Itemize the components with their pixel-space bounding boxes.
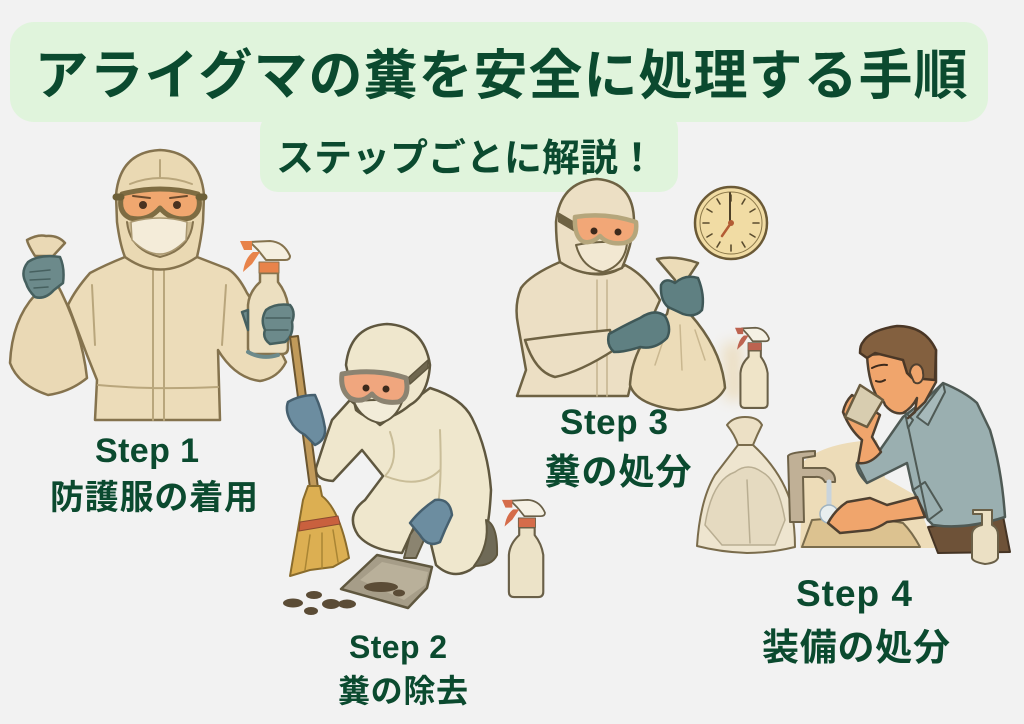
- step 2 label: Step 2: [349, 629, 447, 665]
- boot: [474, 520, 497, 566]
- goggles: [575, 215, 636, 243]
- goggles and face: [121, 189, 199, 219]
- equipment bag: [697, 417, 795, 553]
- subtitle banner: [260, 112, 678, 192]
- background wash: [722, 340, 745, 400]
- step 1 label: Step 1: [95, 432, 199, 470]
- step 4 label: 装備の処分: [762, 627, 950, 668]
- background wash: [800, 440, 935, 548]
- trousers: [928, 516, 1010, 553]
- sleeve: [525, 330, 614, 377]
- shirt: [857, 383, 1005, 526]
- illustration: step 4 disposal and hand washing: [697, 326, 1010, 564]
- left glove: [287, 395, 325, 445]
- broom: [290, 336, 318, 488]
- step 4 label: [762, 573, 950, 668]
- hood: [116, 150, 204, 270]
- lower glove: [608, 312, 669, 352]
- illustration: step 2 worker sweeping: [283, 324, 545, 615]
- bag: [630, 258, 725, 410]
- spray bottle: [735, 328, 769, 408]
- spray bottle: [240, 241, 290, 354]
- cup: [845, 385, 883, 427]
- hood: [556, 179, 634, 274]
- title banner: [10, 22, 988, 122]
- dustpan: [404, 526, 424, 558]
- left glove: [23, 256, 64, 298]
- face mask: [354, 400, 402, 423]
- hood: [346, 324, 430, 419]
- illustration: step 3 worker with bag and clock: [517, 179, 769, 410]
- face mask: [576, 242, 627, 272]
- step 3 label: 糞の処分: [544, 451, 692, 492]
- subtitle banner: ステップごとに解説！: [276, 138, 656, 180]
- step 2 label: [338, 629, 468, 709]
- upper glove: [661, 277, 703, 315]
- illustration: step 1 worker in protective suit: [10, 150, 294, 420]
- step 3 label: Step 3: [560, 403, 668, 442]
- suit: [316, 388, 491, 574]
- goggles: [342, 372, 407, 402]
- right glove: [410, 500, 452, 544]
- suit body: [68, 257, 286, 420]
- step 1 label: [50, 432, 258, 517]
- title banner: アライグマの糞を安全に処理する手順: [34, 46, 968, 106]
- upper hand and forearm: [843, 395, 881, 463]
- faucet: [788, 451, 835, 522]
- clock: [695, 187, 767, 259]
- step 1 label: 防護服の着用: [50, 479, 258, 517]
- right glove: [242, 305, 294, 344]
- left bag: [10, 236, 87, 395]
- step 3 label: [544, 403, 692, 492]
- face mask: [131, 218, 187, 254]
- step 4 label: Step 4: [796, 573, 912, 614]
- soap bottle: [972, 510, 998, 564]
- step 2 label: 糞の除去: [338, 673, 468, 709]
- water: [826, 482, 832, 510]
- lower arm: [828, 497, 925, 533]
- suit: [517, 262, 660, 396]
- chin opening: [127, 222, 193, 257]
- droppings: [283, 598, 303, 608]
- head: [867, 350, 936, 418]
- sink: [802, 518, 920, 547]
- spray bottle: [502, 500, 545, 597]
